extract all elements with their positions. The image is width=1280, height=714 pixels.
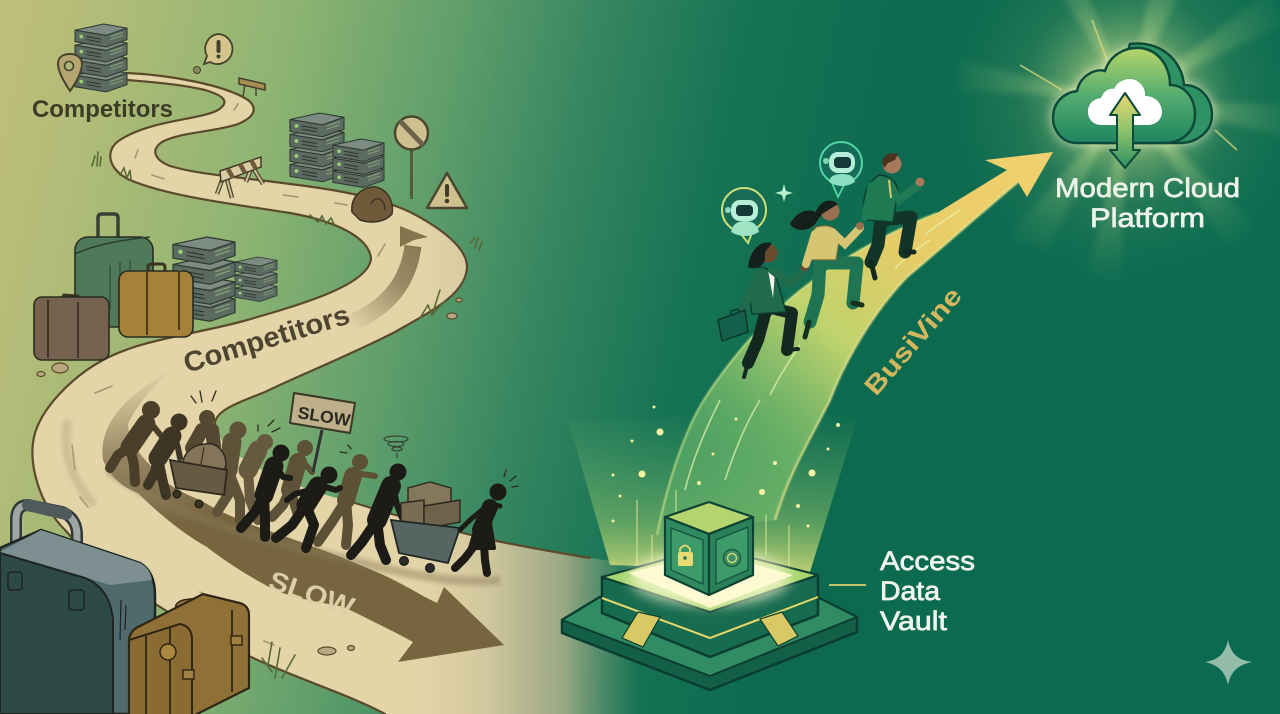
cloud glow and rays: [938, 0, 1280, 290]
road arrow up: [345, 226, 428, 326]
top surface: [602, 547, 818, 612]
cloud back layer: [1100, 43, 1212, 143]
glowing inset: [628, 552, 793, 608]
safe icon: [665, 502, 753, 595]
barrier on road: [217, 157, 263, 198]
label Access Data Vault: Vault: [880, 606, 948, 636]
large dark suitcase: [0, 505, 155, 714]
walker 9: [318, 454, 375, 545]
server stacks: left: [173, 237, 277, 321]
dial: [724, 550, 740, 566]
boulder: [352, 187, 392, 222]
lower base: [562, 597, 857, 690]
brown suitcase: [34, 295, 109, 360]
pebbles: [37, 298, 462, 655]
icon: no-entry sign: [395, 116, 428, 199]
tan suitcase: [119, 264, 193, 337]
vault connector line: [829, 584, 866, 586]
icon: alert bubble: [194, 34, 232, 74]
person: woman with ponytail: [790, 201, 864, 337]
walker 11: distressed woman: [455, 484, 506, 573]
gold connectors: [622, 612, 798, 647]
dark walkers: [241, 444, 406, 560]
road label SLOW: SLOW: [265, 565, 359, 623]
icon: warning triangle: [427, 173, 467, 208]
BusiVine swoosh arrow: [657, 152, 1053, 535]
padlock: [678, 546, 693, 566]
walker 2: [148, 414, 188, 495]
label Access Data Vault: Data: [880, 576, 941, 606]
particles: [612, 406, 840, 528]
icon: location pin: [58, 54, 82, 91]
sparkle: [775, 184, 793, 202]
label Modern Cloud Platform: Platform: [1090, 203, 1205, 233]
dirt under walkers: [108, 470, 500, 581]
cart with bags: [170, 444, 227, 508]
cart with boxes: [391, 482, 460, 572]
person: woman with briefcase: [718, 242, 809, 377]
label Modern Cloud Platform: [1055, 173, 1240, 233]
SLOW picket sign: [290, 393, 355, 472]
server stack: top left: [75, 24, 127, 92]
grass tufts: [92, 152, 482, 678]
label Competitors: Competitors: [32, 96, 173, 123]
faded walkers: [110, 401, 375, 545]
briefcase: [718, 309, 748, 341]
vault light beam: [568, 410, 860, 572]
person: man in green suit: [864, 153, 924, 278]
robot bubble 2: [820, 142, 862, 197]
double arrow: [1110, 93, 1140, 168]
cloud halo: [1053, 48, 1212, 143]
winding road: [32, 73, 640, 714]
motion marks: [191, 391, 518, 487]
icon: confusion swirl: [384, 436, 408, 458]
watermark star: [1205, 640, 1252, 685]
vault platform: [562, 547, 857, 690]
walker 8: [276, 466, 340, 548]
inner white cloud: [1088, 79, 1162, 125]
road label Competitors: Competitors: [180, 299, 353, 379]
green suitcase: [75, 214, 153, 327]
label Access Data Vault: Access: [880, 546, 975, 576]
road arrow slow: [102, 370, 504, 662]
SLOW picket sign: SLOW: [296, 403, 353, 430]
walker 6: [241, 444, 290, 537]
walker 4: [217, 422, 246, 520]
large brown suitcase: [129, 594, 249, 714]
vertical light streaks: [637, 490, 789, 575]
label Modern Cloud Platform: Modern Cloud: [1055, 173, 1240, 203]
gold stripe: [602, 597, 818, 638]
walker 1: [110, 401, 165, 482]
walker 10: [351, 464, 406, 560]
cloud icon: [1053, 43, 1212, 168]
label Access Data Vault: [880, 546, 975, 636]
label BusiVine: BusiVine: [858, 281, 968, 401]
walker 5: [248, 434, 273, 520]
server stacks: middle: [290, 113, 384, 187]
upper tier side: [602, 575, 818, 657]
robot bubble 1: [722, 188, 766, 243]
cloud front layer: [1053, 48, 1195, 143]
small barrier: [239, 78, 265, 96]
walker 3: [192, 410, 215, 448]
walker 7: [272, 440, 313, 517]
